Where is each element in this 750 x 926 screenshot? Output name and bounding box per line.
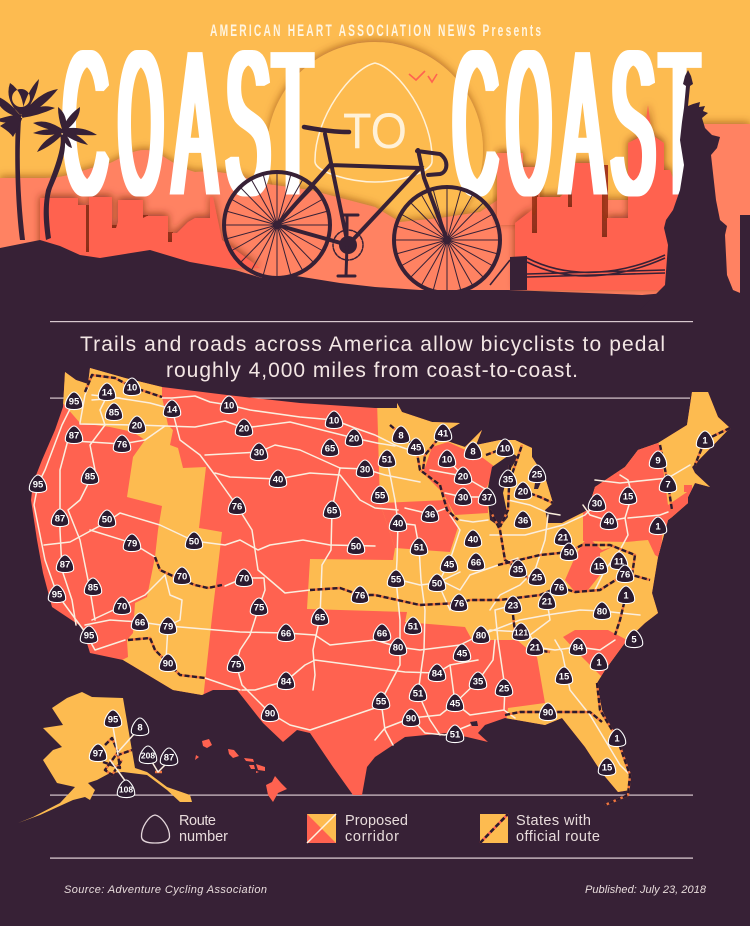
route number badges: 51 [413, 688, 424, 699]
route number badges: 21 [542, 596, 553, 607]
route number badges: 11 [614, 556, 625, 567]
route number badges [29, 378, 714, 798]
route number badges: 95 [108, 714, 119, 725]
route number badges: 76 [117, 439, 127, 450]
left skyline slits [85, 205, 173, 257]
route number badges: 30 [360, 464, 370, 475]
sun disc [267, 42, 483, 258]
route number badges: 84 [281, 676, 292, 687]
right skyline [515, 105, 690, 290]
route number badges: 87 [69, 430, 79, 441]
route number badges: 15 [623, 491, 634, 502]
publication date: Published: July 23, 2018 [585, 884, 707, 896]
route number badges: 66 [377, 628, 387, 639]
route number badges: 8 [470, 446, 476, 457]
route number badges: 37 [482, 492, 492, 503]
route number badges: 51 [382, 454, 393, 465]
route number badges: 65 [315, 612, 326, 623]
route number badges: 75 [231, 659, 242, 670]
distant tower [740, 215, 750, 300]
route number badges: 45 [411, 442, 422, 453]
route number badges: 76 [355, 590, 365, 601]
official dashed routes [85, 375, 730, 805]
route number badges: 50 [432, 578, 442, 589]
route number badges: 8 [137, 722, 143, 733]
route number badges: 1 [655, 521, 661, 532]
legend: route number: number [179, 829, 228, 845]
title left word: O [119, 9, 163, 240]
legend: proposed corridor [307, 813, 408, 845]
route number badges: 84 [573, 642, 584, 653]
land base, corridor states [31, 368, 730, 795]
title right word [453, 7, 699, 240]
ground silhouette [0, 240, 750, 330]
legend: official route: States with [516, 813, 591, 829]
legend: official route [480, 813, 600, 845]
route number badges: 10 [224, 400, 234, 411]
route number badges: 75 [254, 602, 265, 613]
route number badges: 45 [444, 559, 455, 570]
route number badges: 76 [232, 501, 242, 512]
route number badges: 10 [329, 415, 339, 426]
route number badges: 66 [471, 557, 481, 568]
title right word: T [660, 8, 699, 239]
route number badges: 76 [454, 598, 464, 609]
sky [0, 0, 750, 320]
route number badges: 51 [408, 621, 419, 632]
route shield with TO: TO [343, 103, 407, 159]
title right word: A [561, 8, 604, 239]
front wheel [394, 187, 500, 293]
route number badges: 80 [393, 642, 403, 653]
map of lower 48 states [31, 350, 750, 805]
route number badges: 1 [596, 657, 602, 668]
title left word: A [174, 8, 216, 239]
route number badges: 66 [281, 628, 291, 639]
official route states, west [60, 360, 222, 700]
title left word: S [226, 7, 270, 239]
legend: official route: official route [516, 829, 600, 845]
title left word [63, 7, 312, 240]
route number badges: 87 [60, 559, 70, 570]
route number badges: 1 [623, 590, 629, 601]
route number badges: 15 [594, 561, 605, 572]
route number badges: 40 [393, 518, 403, 529]
paper hills [0, 124, 750, 320]
route number badges: 21 [558, 532, 569, 543]
alaska [18, 692, 192, 823]
route number badges: 55 [391, 574, 402, 585]
route number badges: 20 [132, 420, 142, 431]
route number badges: 70 [239, 573, 249, 584]
route number badges: 41 [438, 428, 449, 439]
route number badges: 10 [500, 443, 510, 454]
route number badges: 50 [189, 536, 199, 547]
route number badges: 87 [55, 513, 65, 524]
handlebar [417, 151, 446, 175]
route number badges: 21 [530, 642, 541, 653]
route number badges: 8 [398, 430, 404, 441]
corridor states, east overlays [380, 440, 692, 678]
route number badges: 36 [518, 515, 528, 526]
route number badges: 10 [442, 454, 452, 465]
route number badges: 23 [508, 600, 518, 611]
bicycle [224, 127, 500, 293]
route number badges: 20 [239, 423, 249, 434]
route number badges: 14 [102, 387, 113, 398]
bicycle routes, white [34, 388, 690, 775]
route number badges: 85 [88, 582, 99, 593]
route number badges: 20 [458, 471, 468, 482]
route number badges: 79 [163, 621, 173, 632]
route number badges: 87 [164, 752, 174, 763]
route number badges: 90 [265, 708, 275, 719]
title right word: C [453, 9, 498, 239]
route number badges: 65 [327, 505, 338, 516]
route number badges: 80 [597, 606, 607, 617]
route number badges: 40 [468, 534, 478, 545]
subtitle: roughly 4,000 miles from coast-to-coast. [166, 359, 578, 382]
route number badges: 25 [532, 572, 543, 583]
route number badges: 79 [127, 538, 137, 549]
route shield with TO [315, 63, 432, 182]
legend: route number [141, 813, 228, 845]
top line of text: AMERICAN HEART ASSOCIATION NEWS Presents [210, 22, 541, 40]
route number badges: 55 [376, 696, 387, 707]
route number badges: 51 [450, 729, 461, 740]
right skyline slits [532, 165, 608, 239]
route number badges: 20 [349, 433, 359, 444]
route number badges: 50 [564, 547, 574, 558]
route number badges: 95 [69, 396, 80, 407]
route number badges: 90 [406, 713, 416, 724]
legend [141, 813, 600, 845]
route number badges: 35 [473, 676, 484, 687]
route number badges: 40 [273, 474, 283, 485]
route number badges: 85 [109, 407, 120, 418]
saddle [304, 127, 349, 132]
route number badges: 9 [655, 455, 661, 466]
header illustration [0, 0, 750, 330]
route number badges: 84 [432, 668, 443, 679]
route number badges: 30 [458, 492, 468, 503]
route number badges: 121 [514, 627, 528, 637]
bottom rule [50, 858, 693, 859]
route number badges: 76 [554, 582, 564, 593]
back tower right [497, 153, 540, 225]
title left word: C [63, 9, 108, 239]
route number badges: 45 [450, 698, 461, 709]
rule behind map top [50, 398, 690, 399]
route number badges: 30 [592, 498, 602, 509]
statue of liberty [640, 70, 745, 310]
left skyline [40, 197, 260, 268]
subtitle: Trails and roads across America allow bicyclists to pedal [80, 333, 665, 356]
route number badges: 1 [702, 435, 708, 446]
frame [277, 134, 447, 245]
route number badges: 85 [85, 471, 96, 482]
rear wheel [224, 172, 330, 278]
legend: proposed corridor: corridor [345, 829, 399, 845]
route number badges: 108 [119, 784, 133, 794]
route number badges: 14 [167, 404, 178, 415]
route number badges: 35 [503, 474, 514, 485]
route number badges: 50 [102, 514, 112, 525]
chainring and crank [333, 230, 363, 260]
route number badges: 95 [84, 630, 95, 641]
route number badges: 50 [351, 541, 361, 552]
palm trees [0, 79, 97, 240]
route number badges: 10 [127, 382, 137, 393]
route number badges: 45 [457, 648, 468, 659]
title left word: T [273, 8, 312, 239]
rule behind map bottom [50, 794, 693, 796]
hawaii [195, 739, 287, 802]
route number badges: 208 [141, 750, 155, 760]
route number badges: 15 [559, 671, 570, 682]
route number badges: 80 [476, 630, 486, 641]
route number badges: 55 [375, 490, 386, 501]
route number badges: 25 [532, 469, 543, 480]
route number badges: 95 [33, 479, 44, 490]
route number badges: 51 [414, 542, 425, 553]
route number badges: 5 [631, 634, 637, 645]
bridge [490, 255, 665, 290]
subtitle [80, 333, 665, 382]
route number badges: 95 [52, 589, 63, 600]
route number badges: 76 [620, 569, 630, 580]
route number badges: 30 [254, 447, 264, 458]
route number badges: 36 [425, 509, 435, 520]
route number badges: 25 [499, 683, 510, 694]
route number badges: 66 [135, 617, 145, 628]
route number badges: 15 [602, 762, 613, 773]
title right word: O [507, 9, 551, 240]
route number badges: 90 [163, 658, 173, 669]
route number badges: 97 [93, 748, 103, 759]
legend: proposed corridor: Proposed [345, 813, 408, 829]
route number badges: 1 [614, 733, 620, 744]
route number badges: 65 [325, 443, 336, 454]
route number badges: 90 [543, 707, 553, 718]
route number badges: 40 [604, 516, 614, 527]
route number badges: 70 [177, 571, 187, 582]
route number badges: 7 [665, 479, 671, 490]
route number badges: 35 [513, 564, 524, 575]
title right word: S [611, 7, 655, 239]
route number badges: 70 [117, 601, 127, 612]
birds [409, 71, 437, 82]
legend: route number: Route [179, 813, 216, 829]
official route states, east [307, 392, 729, 792]
great lakes [470, 453, 541, 726]
source: Source: Adventure Cycling Association [64, 884, 267, 896]
route number badges: 20 [518, 486, 528, 497]
top rule [50, 321, 693, 322]
